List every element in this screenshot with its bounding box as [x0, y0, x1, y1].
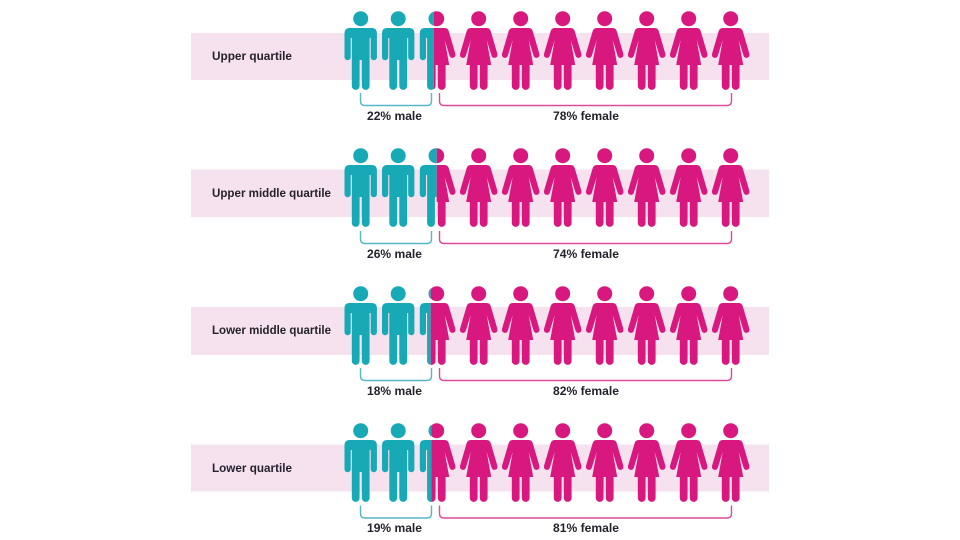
label: 19% male: 19% male	[367, 523, 422, 535]
row label: upper quartile: Upper quartile	[212, 51, 292, 63]
bracket: male share	[360, 93, 432, 106]
bracket: male share	[360, 506, 432, 518]
panel: upper quartile row	[191, 11, 769, 123]
icons: male figures	[344, 148, 437, 227]
background band	[191, 170, 769, 217]
panel: lower middle quartile row	[191, 286, 769, 398]
bracket: female share	[440, 231, 732, 244]
bracket: male share	[360, 368, 432, 380]
background band	[191, 444, 769, 492]
label: 26% male: 26% male	[367, 249, 422, 261]
row label: lower middle quartile: Lower middle quartile	[212, 325, 331, 337]
label: 78% female: 78% female	[553, 111, 619, 123]
icons: female figures	[418, 423, 749, 502]
label: 18% male: 18% male	[367, 386, 422, 398]
panel: upper middle quartile row	[191, 148, 769, 261]
background band	[191, 307, 769, 355]
bracket: female share	[440, 368, 732, 380]
icons: female figures	[418, 286, 749, 365]
icons: female figures	[418, 11, 749, 90]
row label: upper middle quartile: Upper middle quartile	[212, 188, 331, 200]
icons: male figures	[344, 286, 431, 365]
row label: lower quartile: Lower quartile	[212, 463, 292, 475]
label: 22% male: 22% male	[367, 111, 422, 123]
label: 82% female: 82% female	[553, 386, 619, 398]
bracket: female share	[440, 93, 732, 106]
icons: male figures	[344, 423, 432, 502]
label: 74% female: 74% female	[553, 249, 619, 261]
bracket: male share	[360, 231, 432, 244]
icons: female figures	[418, 148, 749, 227]
label: 81% female: 81% female	[553, 523, 619, 535]
panel: lower quartile row	[191, 423, 769, 535]
background band	[191, 33, 769, 80]
icons: male figures	[344, 11, 434, 90]
bracket: female share	[440, 506, 732, 518]
